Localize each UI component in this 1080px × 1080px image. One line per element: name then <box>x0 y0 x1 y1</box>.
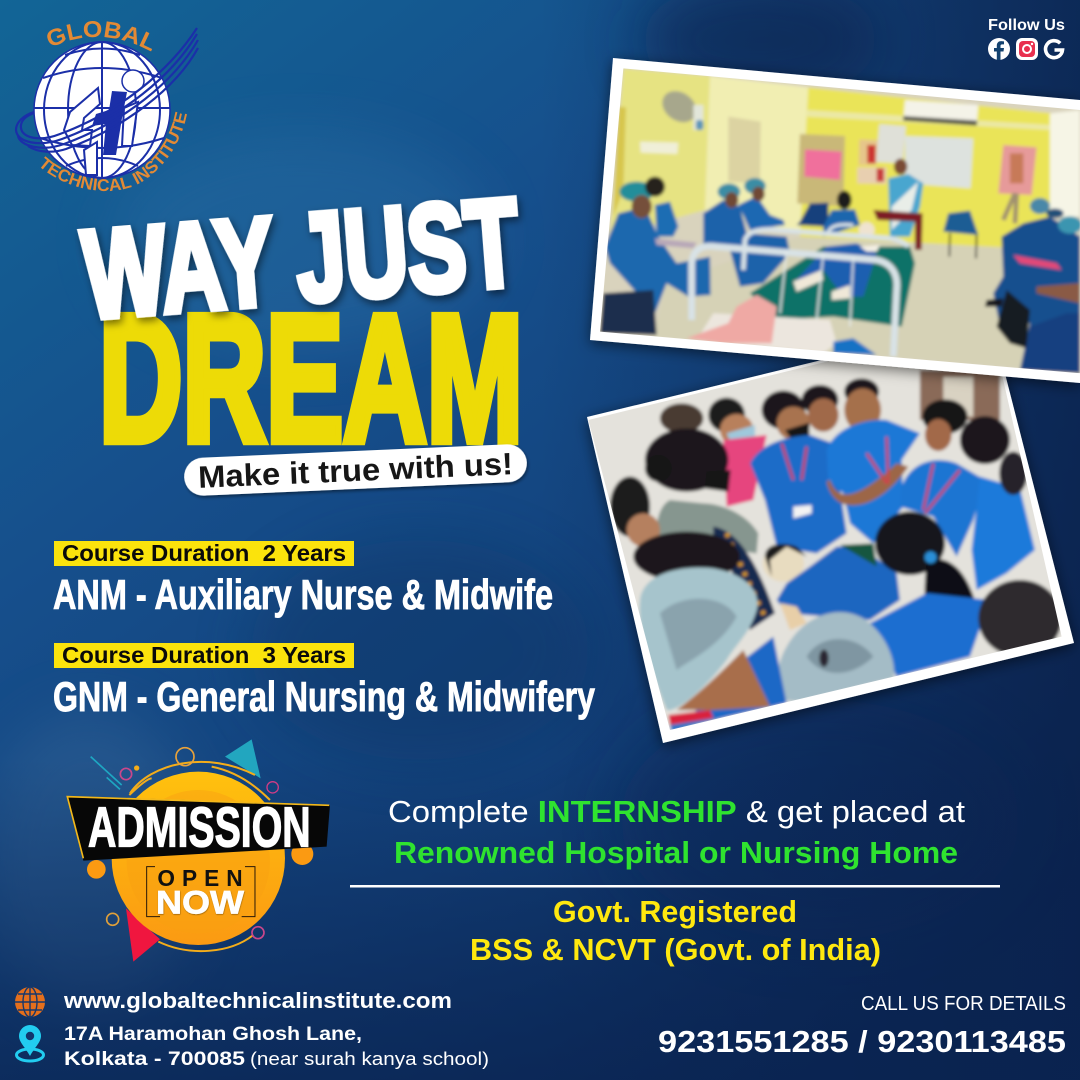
logo name text: TECHNICAL INSTITUTE <box>40 112 187 192</box>
contact: phone <box>658 993 1066 1059</box>
air conditioner <box>903 100 978 125</box>
front-left woman <box>645 428 728 492</box>
hair and heads, back row <box>660 403 703 433</box>
address: 17A Haramohan Ghosh Lane, <box>64 1023 362 1045</box>
fan <box>661 90 696 124</box>
icon: instagram <box>1016 38 1038 60</box>
contact: website and address <box>15 987 489 1070</box>
phone numbers: 9231551285 / 9230113485 <box>658 1024 1066 1059</box>
badge decorative arcs and shapes <box>87 739 313 962</box>
badge bracket box <box>147 867 255 917</box>
logo figure <box>64 70 144 175</box>
follow us label: Follow Us <box>988 17 1065 34</box>
ponytail nurse <box>875 512 945 575</box>
icon: google <box>1046 41 1062 58</box>
photo: nursing practical with mannequin group <box>582 360 1078 750</box>
badge text: open: OPEN <box>157 865 243 891</box>
course 2: name: GNM - General Nursing & Midwifery <box>53 673 595 720</box>
badge orange circle <box>112 772 285 945</box>
registered line: Govt. Registered <box>553 894 797 929</box>
logo swoosh <box>16 28 198 152</box>
icon: facebook <box>988 38 1010 60</box>
right students <box>993 217 1080 370</box>
call us label: CALL US FOR DETAILS <box>861 993 1066 1015</box>
headline: dream: DREAM <box>99 278 523 480</box>
charts and board <box>859 139 878 165</box>
badge: admission open now <box>67 739 330 962</box>
address <box>64 1023 489 1070</box>
accreditation <box>470 894 881 967</box>
student back of head <box>837 191 852 209</box>
badge text: admission: ADMISSION <box>88 797 311 860</box>
logo name text <box>40 21 187 192</box>
placement line: Renowned Hospital or Nursing Home <box>394 835 958 870</box>
hair cap, large <box>640 568 757 710</box>
headline: way just: WAY JUST <box>78 174 524 345</box>
internship line: Complete INTERNSHIP & get placed at <box>388 794 965 829</box>
follow us block <box>988 17 1065 60</box>
course 2: duration tag: Course Duration 3 Years <box>62 642 346 668</box>
course 1: name: ANM - Auxiliary Nurse & Midwife <box>53 571 553 618</box>
bss ncvt line: BSS & NCVT (Govt. of India) <box>470 932 881 967</box>
internship message <box>388 794 965 870</box>
photo: classroom with nursing students and teacher <box>590 50 1080 383</box>
address: (near surah kanya school) <box>250 1048 489 1069</box>
logo globe <box>34 42 170 178</box>
tagline pill: Make it true with us! <box>197 446 514 495</box>
logo name text: GLOBAL <box>47 21 152 52</box>
icon: globe <box>15 987 45 1017</box>
teacher <box>894 159 907 175</box>
headline <box>78 174 528 496</box>
badge text: now: NOW <box>156 884 245 920</box>
logo: Global Technical Institute <box>14 21 199 192</box>
address: Kolkata - 700085 <box>64 1048 245 1070</box>
hospital bed <box>750 247 915 327</box>
doors <box>728 117 761 183</box>
icon: location pin <box>16 1025 44 1061</box>
mannequin and pillow <box>697 313 837 353</box>
website: www.globaltechnicalinstitute.com <box>63 988 452 1013</box>
course 1: duration tag: Course Duration 2 Years <box>62 540 346 566</box>
badge black band <box>67 796 330 861</box>
mannequin <box>763 545 804 582</box>
course list <box>53 540 595 720</box>
left students <box>605 207 711 313</box>
chairs <box>797 203 828 227</box>
